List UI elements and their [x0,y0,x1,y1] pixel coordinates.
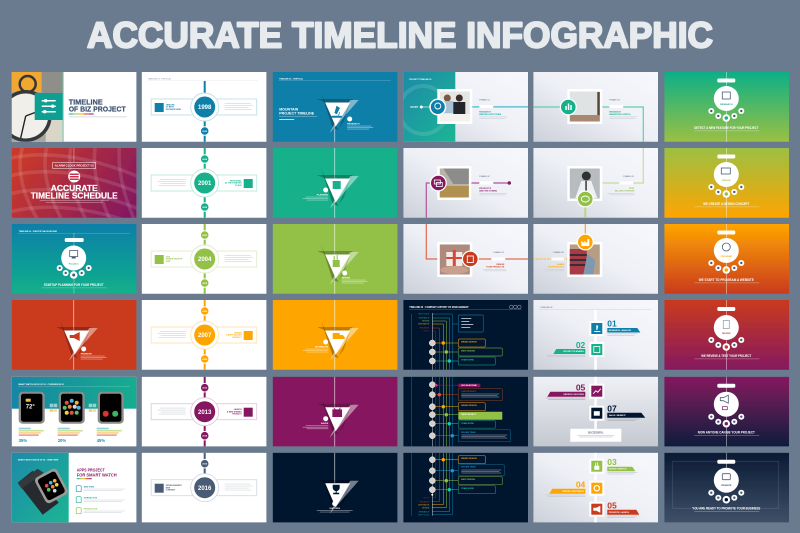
header dots [510,305,521,309]
slide: company history timeline top: TIMELINE 06 : COMPANY HISTORY OF MANAGEMENT [409,306,469,309]
item label: STEP [166,261,171,263]
heading [77,468,117,478]
comparison bars 3 [97,428,122,436]
step 07 label [607,404,645,421]
item label: AT THE STARTING [225,182,242,185]
step circles [708,184,744,198]
phase label [479,175,507,195]
legend labels [418,496,430,516]
menu icon [68,170,80,182]
milestone: teal: TEAM WORK [461,358,474,362]
main circle: Founders [69,264,79,266]
year box [151,251,257,267]
cover heading: OF BIZ PROJECT [69,106,126,114]
phase label: PHASE 05 [623,175,635,178]
phase label: MEETING WITH TEAM [479,113,501,116]
circle icon [577,234,594,250]
item label [166,256,183,263]
item label: COMPANY [166,489,176,492]
heading: APPS PROJECT [77,468,105,473]
step circles [708,490,744,504]
summary box: SUCCESSFUL [588,433,604,435]
small year marker bottom: 2005 [202,283,208,285]
percentage 45: 45% [97,438,105,443]
step 07 icon [589,406,604,421]
main circle: PROMOTE [721,485,732,487]
main circle: DESIGN [722,180,731,182]
clock photo [0,72,63,142]
step badge [332,501,337,506]
step 02 label: PROJECT PLANNING [563,350,584,353]
step 03 label: DESIGN / SKETCH [609,469,627,471]
feature 3: PRODUCTION [84,509,98,511]
milestone: orange: BRAND DESIGN [461,457,477,460]
step circles [708,337,744,351]
slide: steps 01 and 02 [533,300,658,370]
legend labels: RESEARCH [419,317,430,320]
step 03 label: 03 [607,457,617,467]
slide: year 2001 [142,148,266,218]
year marker 1998: 1998 [198,105,212,111]
phase label: YOUR PRODUCT [547,266,565,268]
legend labels: KEY FOCUS [418,514,430,516]
icon: basket [333,408,342,417]
main circle [714,392,739,417]
small year marker top: 2003 [202,235,208,237]
step badge [323,416,328,421]
slide: accurate timeline schedule cover [12,148,136,218]
icon: trophy [333,485,340,494]
feature 1: NEW VIEW [84,487,94,489]
circle icon [430,174,447,192]
slide: year 2016 [142,452,266,522]
phase label: PRODUCTS [479,188,492,190]
small year marker bottom: 2002 [202,207,208,209]
item label: PRODUCT [232,337,243,339]
icon: microscope [332,106,342,118]
item label: NEW [166,487,170,489]
legend labels [418,314,430,333]
phase label: PHASE 01 [479,98,491,102]
item label: 2004 [166,256,171,258]
step badge [81,346,86,352]
slide: steps 01 and 02: TIMELINE 08 [540,307,553,309]
legend labels: DESIGN [422,507,430,509]
item label [166,484,182,492]
legend labels: PROMOTE [420,501,430,503]
milestone: green: BEST DESIGN [461,479,475,481]
item label: A BEST SELLING [226,334,242,337]
percentage 35: 35% [19,438,27,443]
legend labels: DISTRIBUTE [418,504,430,506]
pill [717,230,735,234]
circle icon [462,250,479,268]
icon: safe [333,181,341,189]
phase label: TEST [629,188,635,190]
step 05 icon [589,502,604,517]
pill [65,238,84,242]
slide: phase 06 [533,224,658,294]
item label: A NEW SHINING [227,410,242,413]
slide: year 1998 [142,72,266,142]
heading: WE START TO PROGRAM A WEBSITE [699,278,754,282]
icon: megaphone [70,332,80,341]
slide: detect a new feature [664,72,789,142]
year box [151,327,257,343]
item label: PLACE [235,184,242,187]
step circles [57,265,92,279]
step 05 icon [589,384,604,399]
legend labels: PROMOTE [420,328,430,330]
step 02 label: 02 [576,340,586,350]
step 05 label: PROMOTE / LAUNCH [609,511,630,514]
year box [151,404,257,420]
phase label: MARKETING STATUS [609,113,631,116]
step 02 icon [589,342,604,357]
year marker 2013: 2013 [198,410,212,416]
cover heading: TIMELINE [69,100,103,106]
step label: DESIGN [342,278,351,280]
slide: phase 01: PROJECT TIMELINE 05 [409,79,432,81]
item label: PERSONNEL [230,180,243,182]
item label [225,180,243,187]
connector lines [411,453,452,516]
slide: timeline of biz project cover [12,72,136,142]
item label: CREATE [234,332,242,334]
slide: steps 05 and 07 [533,376,658,446]
circle icon [560,98,577,116]
phase label: DESIGN [496,264,505,266]
step badge [323,340,328,344]
phase label [607,175,635,195]
slide: planning triangle [272,148,398,218]
heading: DETECT A NEW FEATURE FOR YOUR PROJECT [694,126,758,130]
item label [166,104,182,111]
slide: mountain project timeline [272,72,398,142]
milestone: red: OUR PRODUCT [461,391,477,393]
heading: PROJECT TIMELINE [279,112,315,116]
small year marker top: 2000 [202,159,208,161]
pill [717,154,735,158]
phase label [482,251,506,271]
slide: start to program a website [664,224,789,294]
item label: ESTIMATE HERE [166,108,182,111]
watch 2 [59,392,85,424]
slide: phase 02 [403,148,528,218]
phase label: PHASE 03 [493,251,505,254]
step badge [347,116,352,122]
slide: distribute triangle [272,300,398,370]
slide: phase 04 [533,72,658,142]
step 03 icon [589,459,604,474]
phase label: SELLING POSITION [615,190,635,192]
step 04 label: 04 [576,480,586,490]
milestone: orange: BRAND DESIGN [461,404,477,407]
step 02 label [546,340,586,357]
step 01 label: RESEARCH / ANALYSE [609,329,632,332]
grid pattern [2,143,142,226]
pill [717,78,735,82]
slide: apps project for smart watch [12,452,136,522]
slide: phase 01 [403,72,528,142]
phase label: SHARE [557,263,565,266]
item label [227,408,243,416]
connector [533,107,643,142]
icon: truck [333,333,345,339]
item label: LAUNCH [234,408,242,411]
photo: whiteboard [567,89,602,124]
slide: year 2007 [142,300,266,370]
photo: gift [437,242,472,277]
item label: ESTABLISHMENT [166,484,182,487]
step 05 label [546,383,586,400]
step label: DISTRIBUTE [315,346,329,348]
heading [279,108,315,116]
heading: WE REVIEW & TEST YOUR PROJECT [701,354,751,358]
step circles [708,414,744,428]
watch 3 [98,392,124,424]
slide: promote triangle (red) [12,300,136,370]
connector lines [411,377,452,447]
circle icon [577,190,594,208]
year marker 2001: 2001 [198,181,212,187]
milestone: green filled: NEW PROJECT [461,414,477,416]
step 03 label [607,457,637,474]
step 01 label [607,319,640,336]
phase label [609,98,637,119]
main circle: RESEARCH [720,103,733,106]
title: ACCURATE TIMELINE INFOGRAPHIC [87,14,713,56]
cover heading [69,100,126,114]
phase label [543,251,565,271]
phase label: PHASE 02 [479,175,491,178]
phase label: RESEARCH [479,110,491,114]
step 05 label [607,501,639,518]
pill [717,384,735,388]
teal icon panel [35,93,63,120]
step label: SALES [321,422,329,425]
item label: PRODUCT [232,414,243,416]
connector [426,183,509,218]
slide: design triangle [272,224,398,294]
item label [226,332,243,339]
pill [717,307,735,311]
step circles [708,260,744,274]
heading: MOUNTAIN [279,108,298,112]
small year marker bottom: 2008 [202,359,208,361]
photo: fashion [567,242,602,277]
step 04 label: DESIGN / DISTRIBUTE [562,491,584,493]
feature 2: INTERACTIVE [84,497,98,500]
step label: RESEARCH [347,122,360,126]
small year marker bottom: 2014 [202,435,208,438]
phase label: PHASE 04 [609,98,621,102]
slide: success triangle [272,452,398,522]
slide: company history timeline bottom [403,452,528,522]
slide: create a design concept [664,148,789,218]
slide: mountain project timeline: TIMELINE 02 : VERTICAL [279,78,304,81]
connector [584,224,586,236]
slide: year 2013 [142,376,266,446]
year marker 2016: 2016 [198,486,212,492]
item icon [155,103,164,112]
slide: smart watch comparison [12,376,136,446]
colour strip [69,114,127,118]
comparison bars 1 [19,428,44,436]
main circle: REVIEW [722,333,732,335]
small year marker top: 2006 [202,311,208,313]
phase label: YOUR PRODUCTS [486,266,505,268]
slide: year 2004 [142,224,266,294]
legend labels: DISTRIBUTE [418,324,430,326]
cover heading [31,183,118,200]
legend box [458,315,483,332]
year marker 2007: 2007 [198,333,212,339]
slide: review and test [664,300,789,370]
cover heading: TIMELINE SCHEDULE [31,190,118,200]
photo: calculator [437,166,471,200]
connector lines [411,313,458,370]
legend labels: DESIGN [422,321,430,323]
year box [151,480,257,496]
slide: steps 03 04 05 [533,452,658,522]
slide: startup planning: TIMELINE 06 : STARTUP BACKGROUND [19,230,58,233]
photo: stressed man [567,166,602,201]
legend labels: RESEARCH [419,510,430,513]
item icon [155,255,164,264]
year box [151,175,257,191]
item label: OF BEST [166,107,175,109]
item icon [244,408,253,417]
main circle: PROGRAM [721,255,732,258]
comparison bars 2 [58,428,83,436]
year marker 2004: 2004 [198,257,212,263]
phase label: PHASE 06 [553,251,565,254]
slide: company history timeline top [403,300,528,370]
item icon [155,484,164,493]
milestone: teal: TEAM WORK [461,487,474,490]
percentage 20: 20% [58,438,66,443]
slide: smart watch comparison: SMART WATCH MOCK UP 02 : COMPARISON 01 [18,383,65,386]
connector [602,148,643,183]
step 07 label: 07 [607,404,617,414]
connector [426,224,463,259]
watch 1: 72° [26,405,35,411]
phase label [479,98,507,119]
slide: company history timeline middle [403,376,528,446]
small year marker top: 2015 [202,464,208,466]
item label: HIGHER GROWTH [166,259,183,261]
milestone: teal: TEAM WORK [461,422,474,425]
slide: year 1998: TIMELINE 01 : VERTICAL [148,78,172,80]
step label: PROMOTE [81,354,92,356]
circle icon [429,98,446,116]
phase label: RESEARCH [609,110,621,114]
milestone: green: BEST DESIGN [461,350,475,352]
step label: PLANNING [317,194,328,196]
step 05 label: 05 [607,501,617,511]
step label: SUCCESS [329,508,341,510]
heading: STARTUP PLANNING FOR YOUR PROJECT [44,283,104,287]
step 04 label [546,480,586,497]
step badge [342,270,347,276]
heading: NOW ANYONE CAN BE YOUR PROJECT [698,431,755,435]
heading: FOR SMART WATCH [77,473,117,478]
slide: startup planning [12,224,136,294]
phase label: AND THE TUNING [479,190,497,192]
small tiles [50,404,96,412]
slide: ready to promote your business [664,452,789,522]
heading: WE CREATE A DESIGN CONCEPT [703,202,749,206]
icon: pencil cup [333,255,340,267]
watch photo [18,467,69,515]
slide: phase 05 [533,148,658,218]
slide: phase 03 [403,224,528,294]
step 04 icon [589,481,604,496]
legend labels: SALES [423,330,430,333]
step 05 label: GROWTH / SUCCESS [563,394,584,396]
legend labels: KEY FOCUS [418,314,430,316]
pill [717,460,735,464]
start label: START [410,106,419,109]
step 01 icon [589,321,604,336]
step circles [708,108,744,122]
milestone: blue: BIGGER TEAM [461,466,476,469]
item label: TIMELINE [166,104,175,106]
slide: apps project for smart watch: SMART WATCH MOCK UP 02 : USER VIEW [18,459,58,462]
milestone: blue: BIGGER TEAM [461,431,476,434]
heading: YOU ARE READY TO PROMOTE YOUR BUSINESS [692,507,760,511]
cover heading: ACCURATE [51,183,98,193]
item icon [244,179,253,188]
milestone: pink: KEY MILESTONE [461,385,477,387]
milestone: orange: BRAND DESIGN [461,340,477,344]
legend labels: SALES [423,496,430,499]
photo: team [437,89,472,124]
year box [151,99,257,115]
slide: anyone can be your project [664,376,789,446]
small year marker top: 2012 [202,388,208,390]
item icon [244,331,253,340]
small year marker: 2000 [202,131,208,133]
slide: sales triangle [272,376,398,446]
step badge [323,188,328,192]
label box: ALARM CLOCK PROJECT 02 [55,164,94,168]
step 07 label: VALUE / BENEFIT [609,414,626,417]
step 05 label: 05 [576,383,586,393]
step 01 label: 01 [607,319,617,329]
